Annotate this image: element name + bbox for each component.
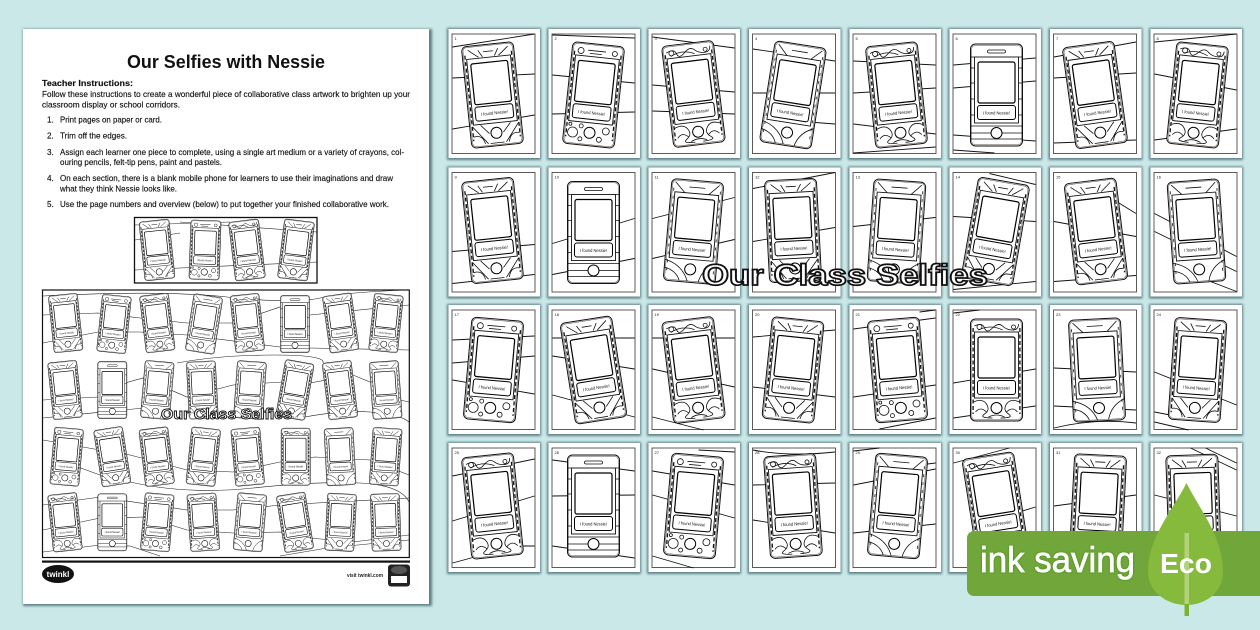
text block: instructions xyxy=(42,79,410,209)
logo: twinkl xyxy=(42,565,74,583)
card r4c2 xyxy=(548,443,640,572)
card r3c7 xyxy=(1050,305,1142,434)
overview heading: Our Class Selfies xyxy=(161,406,292,423)
card r2c3: 11 xyxy=(654,174,659,180)
footer link: visit twinkl.com xyxy=(347,573,383,579)
card r1c3 xyxy=(648,29,740,158)
card r4c4: 28 xyxy=(755,450,760,455)
card r2c3 xyxy=(648,168,740,296)
text block: instructions: Follow these instructions to create a wonderful piece of collaborative class artwork to brighten up your xyxy=(42,90,410,99)
card r3c5: 21 xyxy=(856,312,861,317)
card r4c5: 29 xyxy=(856,450,861,455)
card r1c2 xyxy=(548,29,640,158)
card r4c7 xyxy=(1050,443,1142,572)
text block: instructions: 5. xyxy=(47,200,54,209)
card r4c8 xyxy=(1150,443,1242,572)
text block: instructions: classroom display or school corridors. xyxy=(42,100,180,110)
card r1c2: 2 xyxy=(554,36,558,41)
card r3c8: 24 xyxy=(1156,312,1162,317)
card r2c8 xyxy=(1150,168,1242,296)
card r1c6 xyxy=(950,29,1041,158)
card r2c7: 15 xyxy=(1056,174,1061,180)
badge label: ink saving xyxy=(980,539,1135,580)
card r1c7: 7 xyxy=(1056,36,1059,41)
card r2c4: 12 xyxy=(755,174,760,180)
icon: leaf xyxy=(1148,483,1223,616)
artwork heading: Our Class Selfies: Our Class Selfies xyxy=(702,259,988,292)
card r1c8 xyxy=(1150,29,1242,158)
cards: row 1 xyxy=(448,29,1242,158)
card r1c1 xyxy=(448,29,540,158)
card r1c3: 3 xyxy=(654,36,658,41)
card r3c6 xyxy=(950,305,1041,434)
card r4c6 xyxy=(950,443,1041,572)
badge bar xyxy=(967,531,1260,596)
text block: instructions: what they think Nessie looks like. xyxy=(59,185,177,194)
cards: row 3 xyxy=(448,305,1242,434)
text block: instructions: ouring pencils, felt-tip pens, paint and pastels. xyxy=(60,158,222,167)
card r3c1 xyxy=(448,305,540,434)
card r4c6: 30 xyxy=(956,450,961,455)
card r3c3 xyxy=(648,305,740,434)
text block: instructions: 4. xyxy=(47,174,54,183)
card r2c4 xyxy=(749,168,840,296)
card r2c2 xyxy=(548,168,640,296)
card r1c7 xyxy=(1050,29,1142,158)
panel: teacher instruction sheet xyxy=(23,29,429,604)
card r4c5 xyxy=(850,443,941,572)
card r1c4 xyxy=(749,29,840,158)
cards: row 2 xyxy=(448,168,1242,296)
card r4c2: 26 xyxy=(554,450,560,455)
overview: class artwork layout xyxy=(42,290,409,558)
card r3c8 xyxy=(1150,305,1242,434)
card r3c4: 20 xyxy=(755,312,760,317)
thumbnail: four phones example xyxy=(134,218,317,283)
card r3c1: 17 xyxy=(454,312,460,317)
card r3c6: 22 xyxy=(956,312,961,317)
card r3c5 xyxy=(850,305,941,434)
card r1c5: 5 xyxy=(856,36,858,41)
card r1c6: 6 xyxy=(956,36,958,41)
card r2c5 xyxy=(850,168,941,296)
card r3c4 xyxy=(749,305,840,434)
card r1c4: 4 xyxy=(755,36,758,41)
logo: twinkl: twinkl xyxy=(47,570,69,579)
text block: instructions: Teacher Instructions: xyxy=(42,79,133,88)
card r2c7 xyxy=(1050,168,1142,296)
card r2c1: 9 xyxy=(454,174,458,180)
text block: instructions: 1. xyxy=(47,116,54,125)
badge: planet friendly xyxy=(388,564,410,586)
text block: instructions: 2. xyxy=(47,132,54,141)
card r2c6 xyxy=(950,168,1041,296)
card r2c8: 16 xyxy=(1156,174,1162,180)
card r3c2 xyxy=(548,305,640,434)
cards: row 4 xyxy=(448,443,1242,572)
eco badge xyxy=(967,483,1260,616)
text block: instructions: Use the page numbers and overview (below) to put together your finished collaborative work. xyxy=(60,200,389,209)
card r1c1: 1 xyxy=(454,36,458,41)
text block: instructions: Trim off the edges. xyxy=(60,132,127,141)
card r1c8: 8 xyxy=(1156,36,1160,41)
card r4c8: 32 xyxy=(1156,450,1162,455)
card r2c2: 10 xyxy=(554,174,560,180)
title: Our Selfies with Nessie xyxy=(127,52,325,72)
text block: instructions: Assign each learner one piece to complete, using a single art medium or a variety of crayons, col- xyxy=(60,148,404,157)
card r3c2: 18 xyxy=(554,312,560,317)
card r4c4 xyxy=(749,443,840,572)
card r4c1 xyxy=(448,443,540,572)
card r2c6: 14 xyxy=(956,174,961,180)
card r3c7: 23 xyxy=(1056,312,1061,317)
card r2c5: 13 xyxy=(856,174,861,180)
card r1c5 xyxy=(850,29,941,158)
badge Eco label: Eco xyxy=(1160,548,1212,579)
card r4c7: 31 xyxy=(1056,450,1061,455)
text block: instructions: On each section, there is a blank mobile phone for learners to use their imaginations and draw xyxy=(60,174,393,183)
text block: instructions: 3. xyxy=(47,148,54,157)
card r4c1: 25 xyxy=(454,450,460,455)
card r4c3 xyxy=(648,443,740,572)
footer rule xyxy=(42,560,410,563)
card r4c3: 27 xyxy=(654,450,660,455)
card r2c1 xyxy=(448,168,540,296)
text block: instructions: Print pages on paper or card. xyxy=(60,116,162,125)
card r3c3: 19 xyxy=(654,312,660,317)
